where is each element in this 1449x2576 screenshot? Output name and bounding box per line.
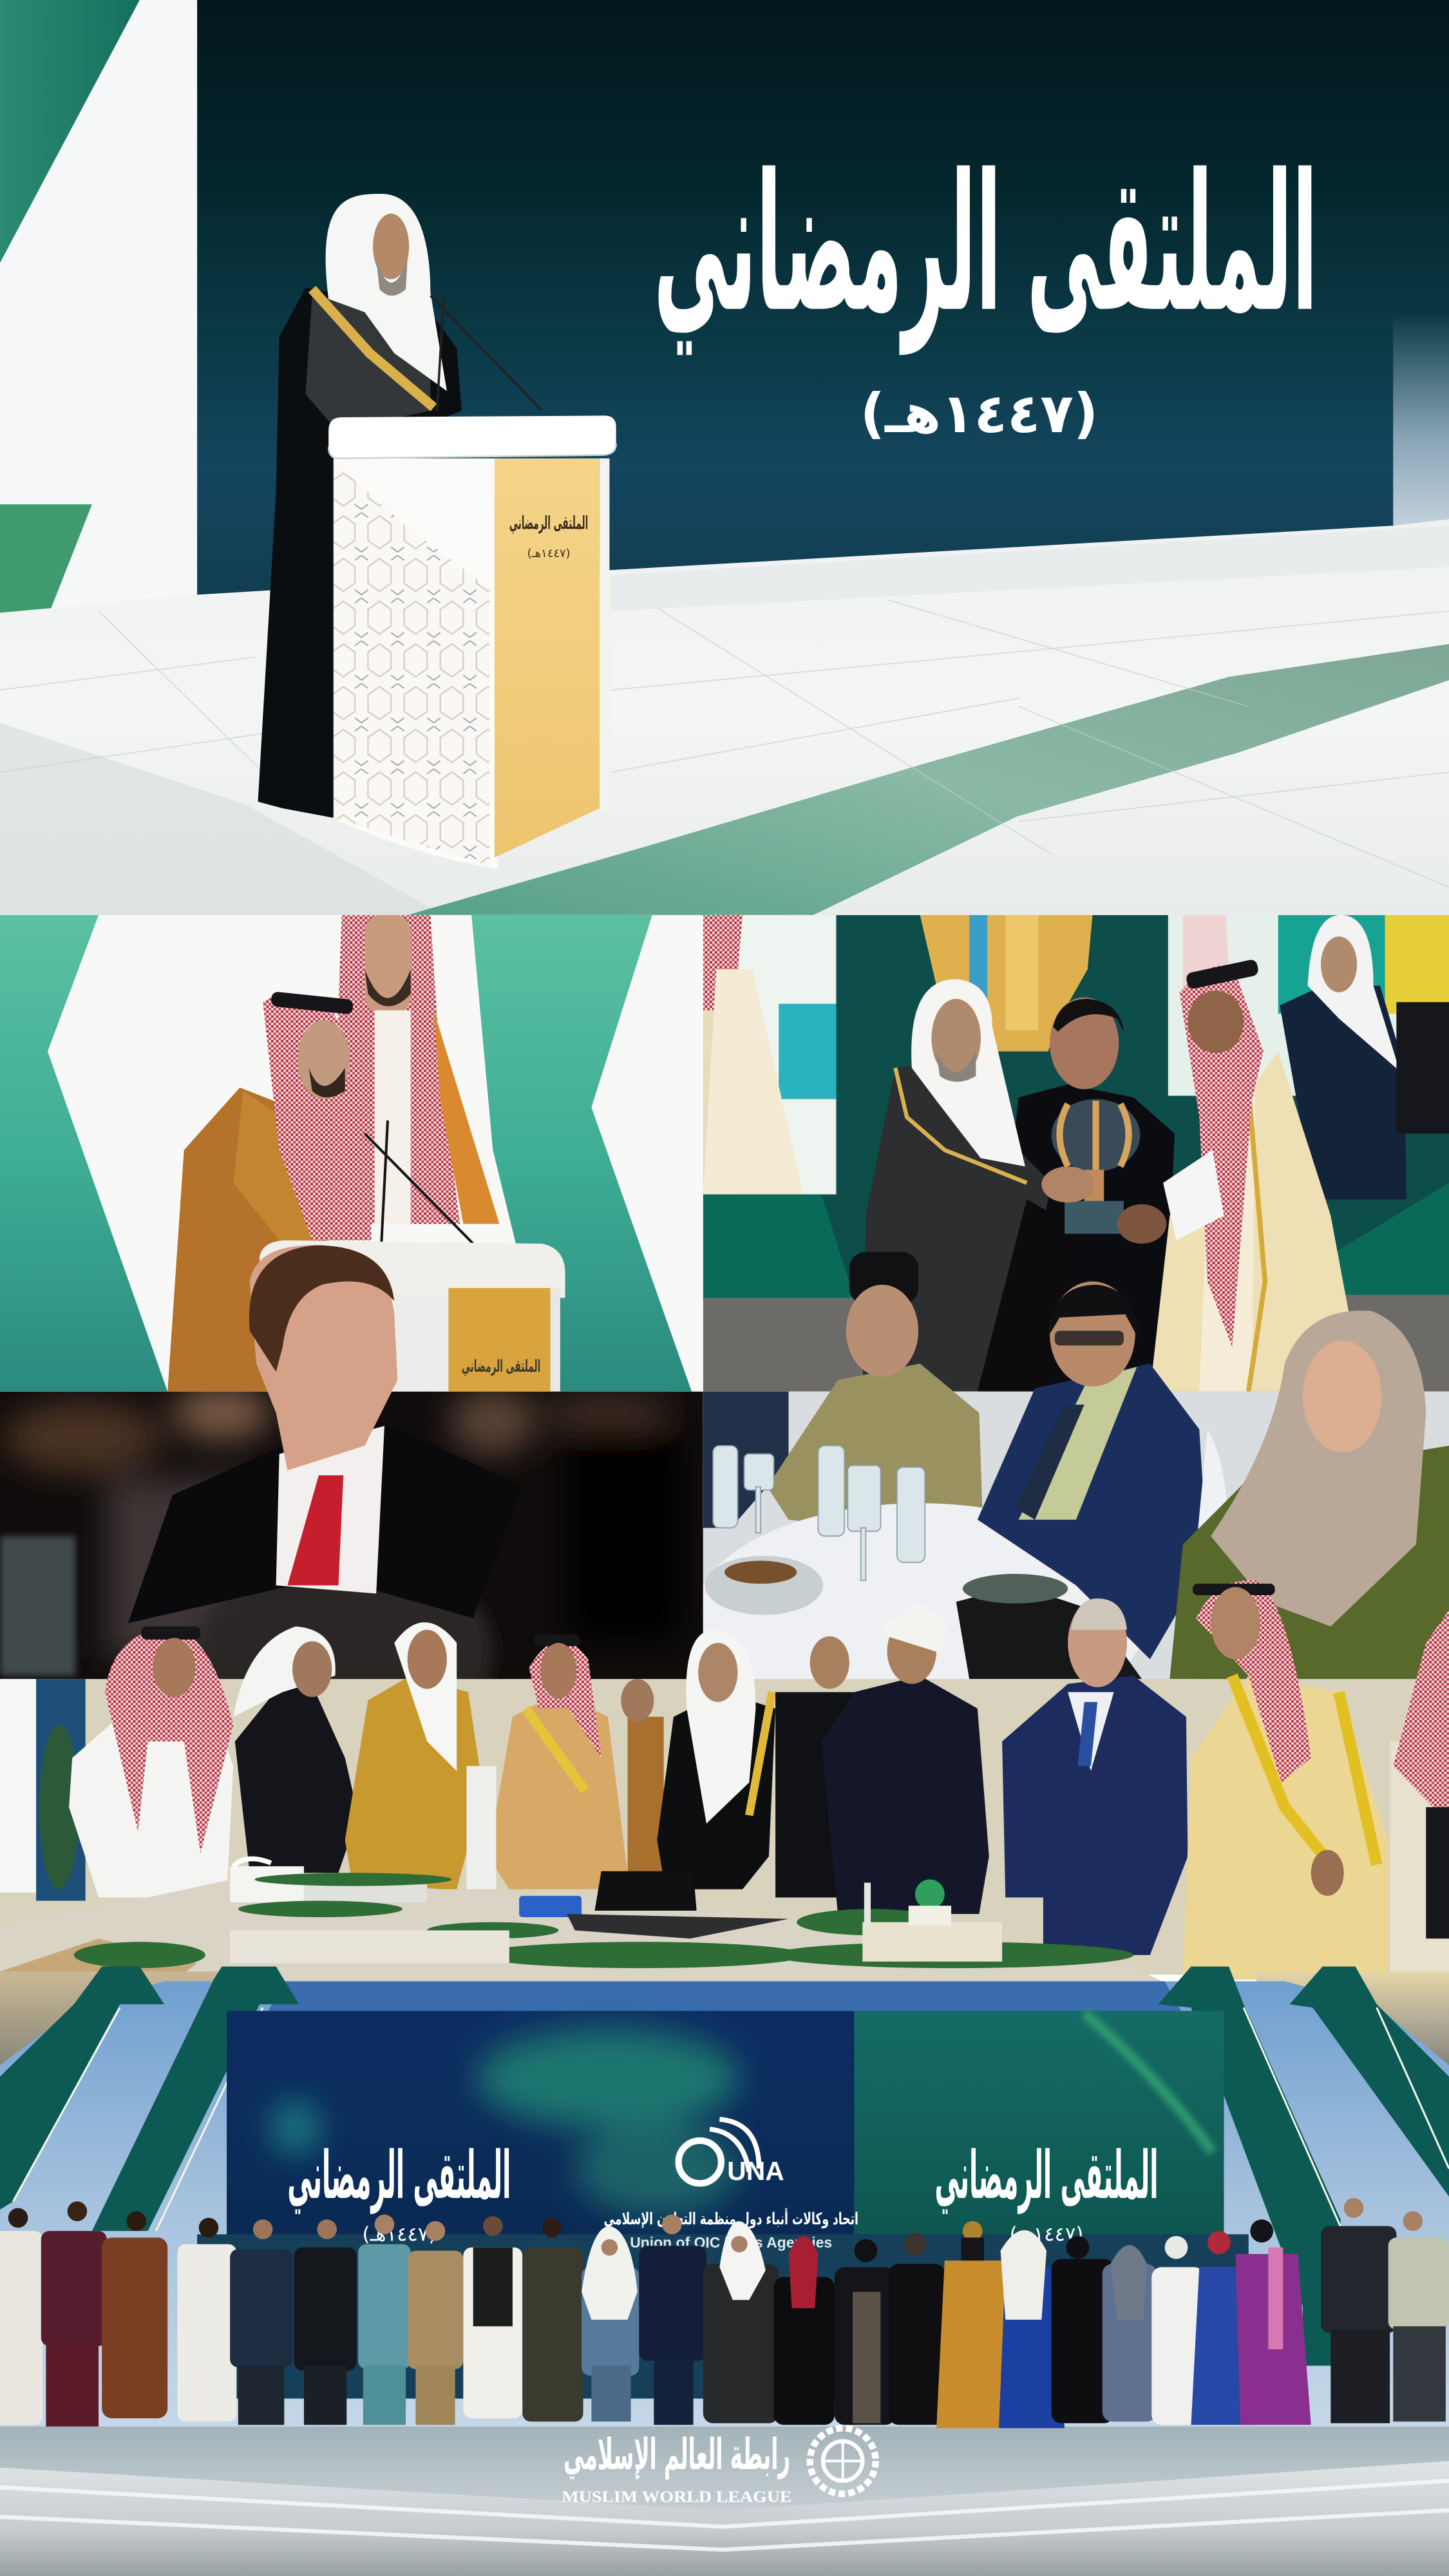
participant 20 bbox=[1103, 2245, 1157, 2421]
blue object on model bbox=[519, 1896, 582, 1917]
award trophy bbox=[1052, 1099, 1140, 1234]
man at right edge bbox=[1390, 1610, 1449, 1971]
participant 24 bbox=[1321, 2198, 1396, 2423]
man in black suit bbox=[775, 1636, 855, 1897]
man in suit with red tie bbox=[128, 1245, 522, 1623]
man in beige robe bbox=[488, 1634, 627, 1889]
speaker in black robe bbox=[258, 194, 542, 818]
left teal chevron bbox=[0, 915, 167, 1392]
main speaker bbox=[167, 991, 473, 1392]
participant 12 bbox=[639, 2215, 706, 2425]
panel: dignitaries viewing model bbox=[0, 1580, 1449, 2054]
panel: group photo on stage bbox=[0, 1967, 1449, 2576]
lectern: الملتقى الرمضاني bbox=[509, 512, 588, 533]
left corner fade of model bbox=[0, 1971, 247, 2119]
participant 25 bbox=[1388, 2211, 1449, 2421]
participant 16 bbox=[889, 2233, 945, 2425]
participant 10 bbox=[522, 2218, 583, 2421]
teal glow on blue screen bbox=[272, 2029, 739, 2215]
man in navy suit bbox=[1002, 1598, 1188, 1955]
participant 14 bbox=[774, 2236, 835, 2425]
participant 13 bbox=[703, 2221, 779, 2423]
left screen year: (١٤٤٧هـ) bbox=[363, 2224, 436, 2246]
lectern bbox=[328, 415, 616, 869]
panel: guest in dark suit bbox=[0, 1387, 703, 1750]
background figures bbox=[466, 1679, 664, 1889]
right green beams bbox=[1158, 1967, 1449, 2365]
Secretary General bbox=[657, 1629, 775, 1889]
Muslim World League logo bbox=[562, 2428, 876, 2506]
man in black robe bbox=[233, 1627, 358, 1873]
beam highlight lines bbox=[13, 2007, 1449, 2234]
participant 17 bbox=[936, 2221, 1016, 2428]
panel: guests at round table bbox=[694, 1252, 1449, 1733]
sky blue side walls bbox=[0, 1982, 1449, 2432]
stage steps bbox=[0, 2461, 1449, 2576]
woman in beige hijab bbox=[1170, 1311, 1449, 1681]
table bbox=[694, 1503, 1147, 1733]
model trees bbox=[74, 1873, 1133, 1968]
UNA English name: Union of OIC News Agencies bbox=[630, 2234, 832, 2251]
UNA logo bbox=[679, 2119, 784, 2186]
right screen inset bbox=[1168, 915, 1449, 1199]
stage wall below the screen bbox=[197, 2234, 1249, 2398]
tablet on stand bbox=[594, 1871, 697, 1911]
black bag bbox=[956, 1574, 1142, 1679]
floor reflection on the right bbox=[611, 526, 1449, 611]
right screen year: (١٤٤٧هـ) bbox=[1010, 2224, 1083, 2246]
participant 9 bbox=[463, 2216, 522, 2418]
league emblem bbox=[810, 2428, 876, 2494]
man in white thobe bbox=[69, 1627, 233, 1897]
green streak on screen bbox=[1084, 2012, 1213, 2152]
participant 22 bbox=[1191, 2231, 1257, 2425]
sheikh in dark robe bbox=[822, 1602, 989, 1914]
floor tile shading bbox=[0, 723, 444, 915]
panel: keynote speech photo bbox=[0, 0, 1449, 915]
right corner fade of robes bbox=[1249, 1971, 1449, 2119]
man in cream robe bbox=[1183, 1580, 1388, 1980]
top blue beam bbox=[266, 1982, 1183, 2014]
lectern: (١٤٤٧هـ) bbox=[527, 547, 571, 560]
green screen bbox=[855, 2011, 1224, 2241]
floor tile lines bbox=[0, 600, 1449, 887]
participant 23 bbox=[1235, 2219, 1311, 2425]
participant 8 bbox=[408, 2221, 463, 2425]
Muslim World League logo: رابطة العالم الإسلامي bbox=[564, 2429, 790, 2480]
glasses and bottles bbox=[713, 1446, 925, 1580]
man in gold robe bbox=[345, 1622, 483, 1889]
blurred audience background bbox=[3, 1387, 682, 1660]
participant 3 bbox=[102, 2211, 167, 2418]
participant 18 bbox=[999, 2230, 1065, 2428]
dark stage screen bbox=[197, 0, 1449, 594]
participant 4 bbox=[178, 2218, 236, 2421]
UNA logo: UNA bbox=[727, 2156, 784, 2186]
teal wedge top left bbox=[0, 0, 140, 263]
dark road on model bbox=[567, 1914, 788, 1938]
blue screen bbox=[227, 2011, 855, 2241]
participant 6 bbox=[294, 2219, 357, 2425]
left screen inset bbox=[703, 915, 836, 1195]
participant 1 bbox=[0, 2208, 43, 2425]
participant 21 bbox=[1151, 2236, 1204, 2425]
architectural model bbox=[0, 1859, 1170, 2054]
lectern bbox=[260, 1240, 565, 1392]
left green beams bbox=[0, 1967, 299, 2231]
panel: award presentation bbox=[703, 915, 1449, 1392]
water bottle blur bbox=[0, 1536, 75, 1676]
participant 7 bbox=[358, 2215, 411, 2425]
lectern logo: الملتقى الرمضاني bbox=[462, 1357, 540, 1376]
Secretary General in grey robe bbox=[862, 979, 1084, 1392]
screen image of speaker bbox=[337, 915, 500, 1224]
panel: group photo on stage: الملتقى الرمضاني bbox=[287, 2137, 511, 2214]
panel: second speaker at lectern bbox=[0, 915, 703, 1392]
dark mauve foreground blur bbox=[197, 1553, 493, 1750]
plant bbox=[39, 1725, 79, 1889]
row of participants bbox=[0, 2198, 1449, 2428]
participant 2 bbox=[41, 2201, 107, 2427]
participant 15 bbox=[835, 2239, 895, 2425]
man in navy suit bbox=[978, 1282, 1208, 1660]
stage floor bbox=[0, 2427, 1449, 2517]
green triangle on left wall bbox=[0, 504, 92, 613]
dark green screen leaves bbox=[703, 1183, 1449, 1298]
green carpet band bbox=[408, 644, 1449, 915]
chairs bbox=[1191, 1429, 1227, 1602]
model building centre bbox=[230, 1930, 509, 1963]
presenter in cream robe bbox=[1117, 959, 1363, 1392]
participant 19 bbox=[1052, 2236, 1114, 2423]
model mosque bbox=[862, 1879, 1002, 1962]
stage floor bbox=[0, 519, 1449, 915]
screen right edge glow bbox=[1393, 312, 1449, 526]
floor behind the group bbox=[703, 1294, 1449, 1392]
dish of dates bbox=[705, 1556, 823, 1615]
league English name: MUSLIM WORLD LEAGUE bbox=[562, 2487, 792, 2506]
participant 5 bbox=[230, 2219, 292, 2425]
UNA Arabic name: اتحاد وكالات أنباء دول منظمة التعاون الإسلامي bbox=[604, 2208, 858, 2229]
room background bbox=[0, 1679, 1449, 1975]
participant 11 bbox=[582, 2226, 639, 2421]
step lines bbox=[0, 2481, 1449, 2550]
model building left bbox=[230, 1859, 427, 1902]
right teal chevron bbox=[471, 915, 692, 1392]
man in olive tunic bbox=[767, 1252, 983, 1536]
event year: (١٤٤٧هـ) bbox=[860, 382, 1098, 445]
trophy backdrop bbox=[920, 915, 1092, 1052]
dark background figures bbox=[703, 1392, 788, 1528]
middle man in suit bbox=[986, 997, 1175, 1392]
